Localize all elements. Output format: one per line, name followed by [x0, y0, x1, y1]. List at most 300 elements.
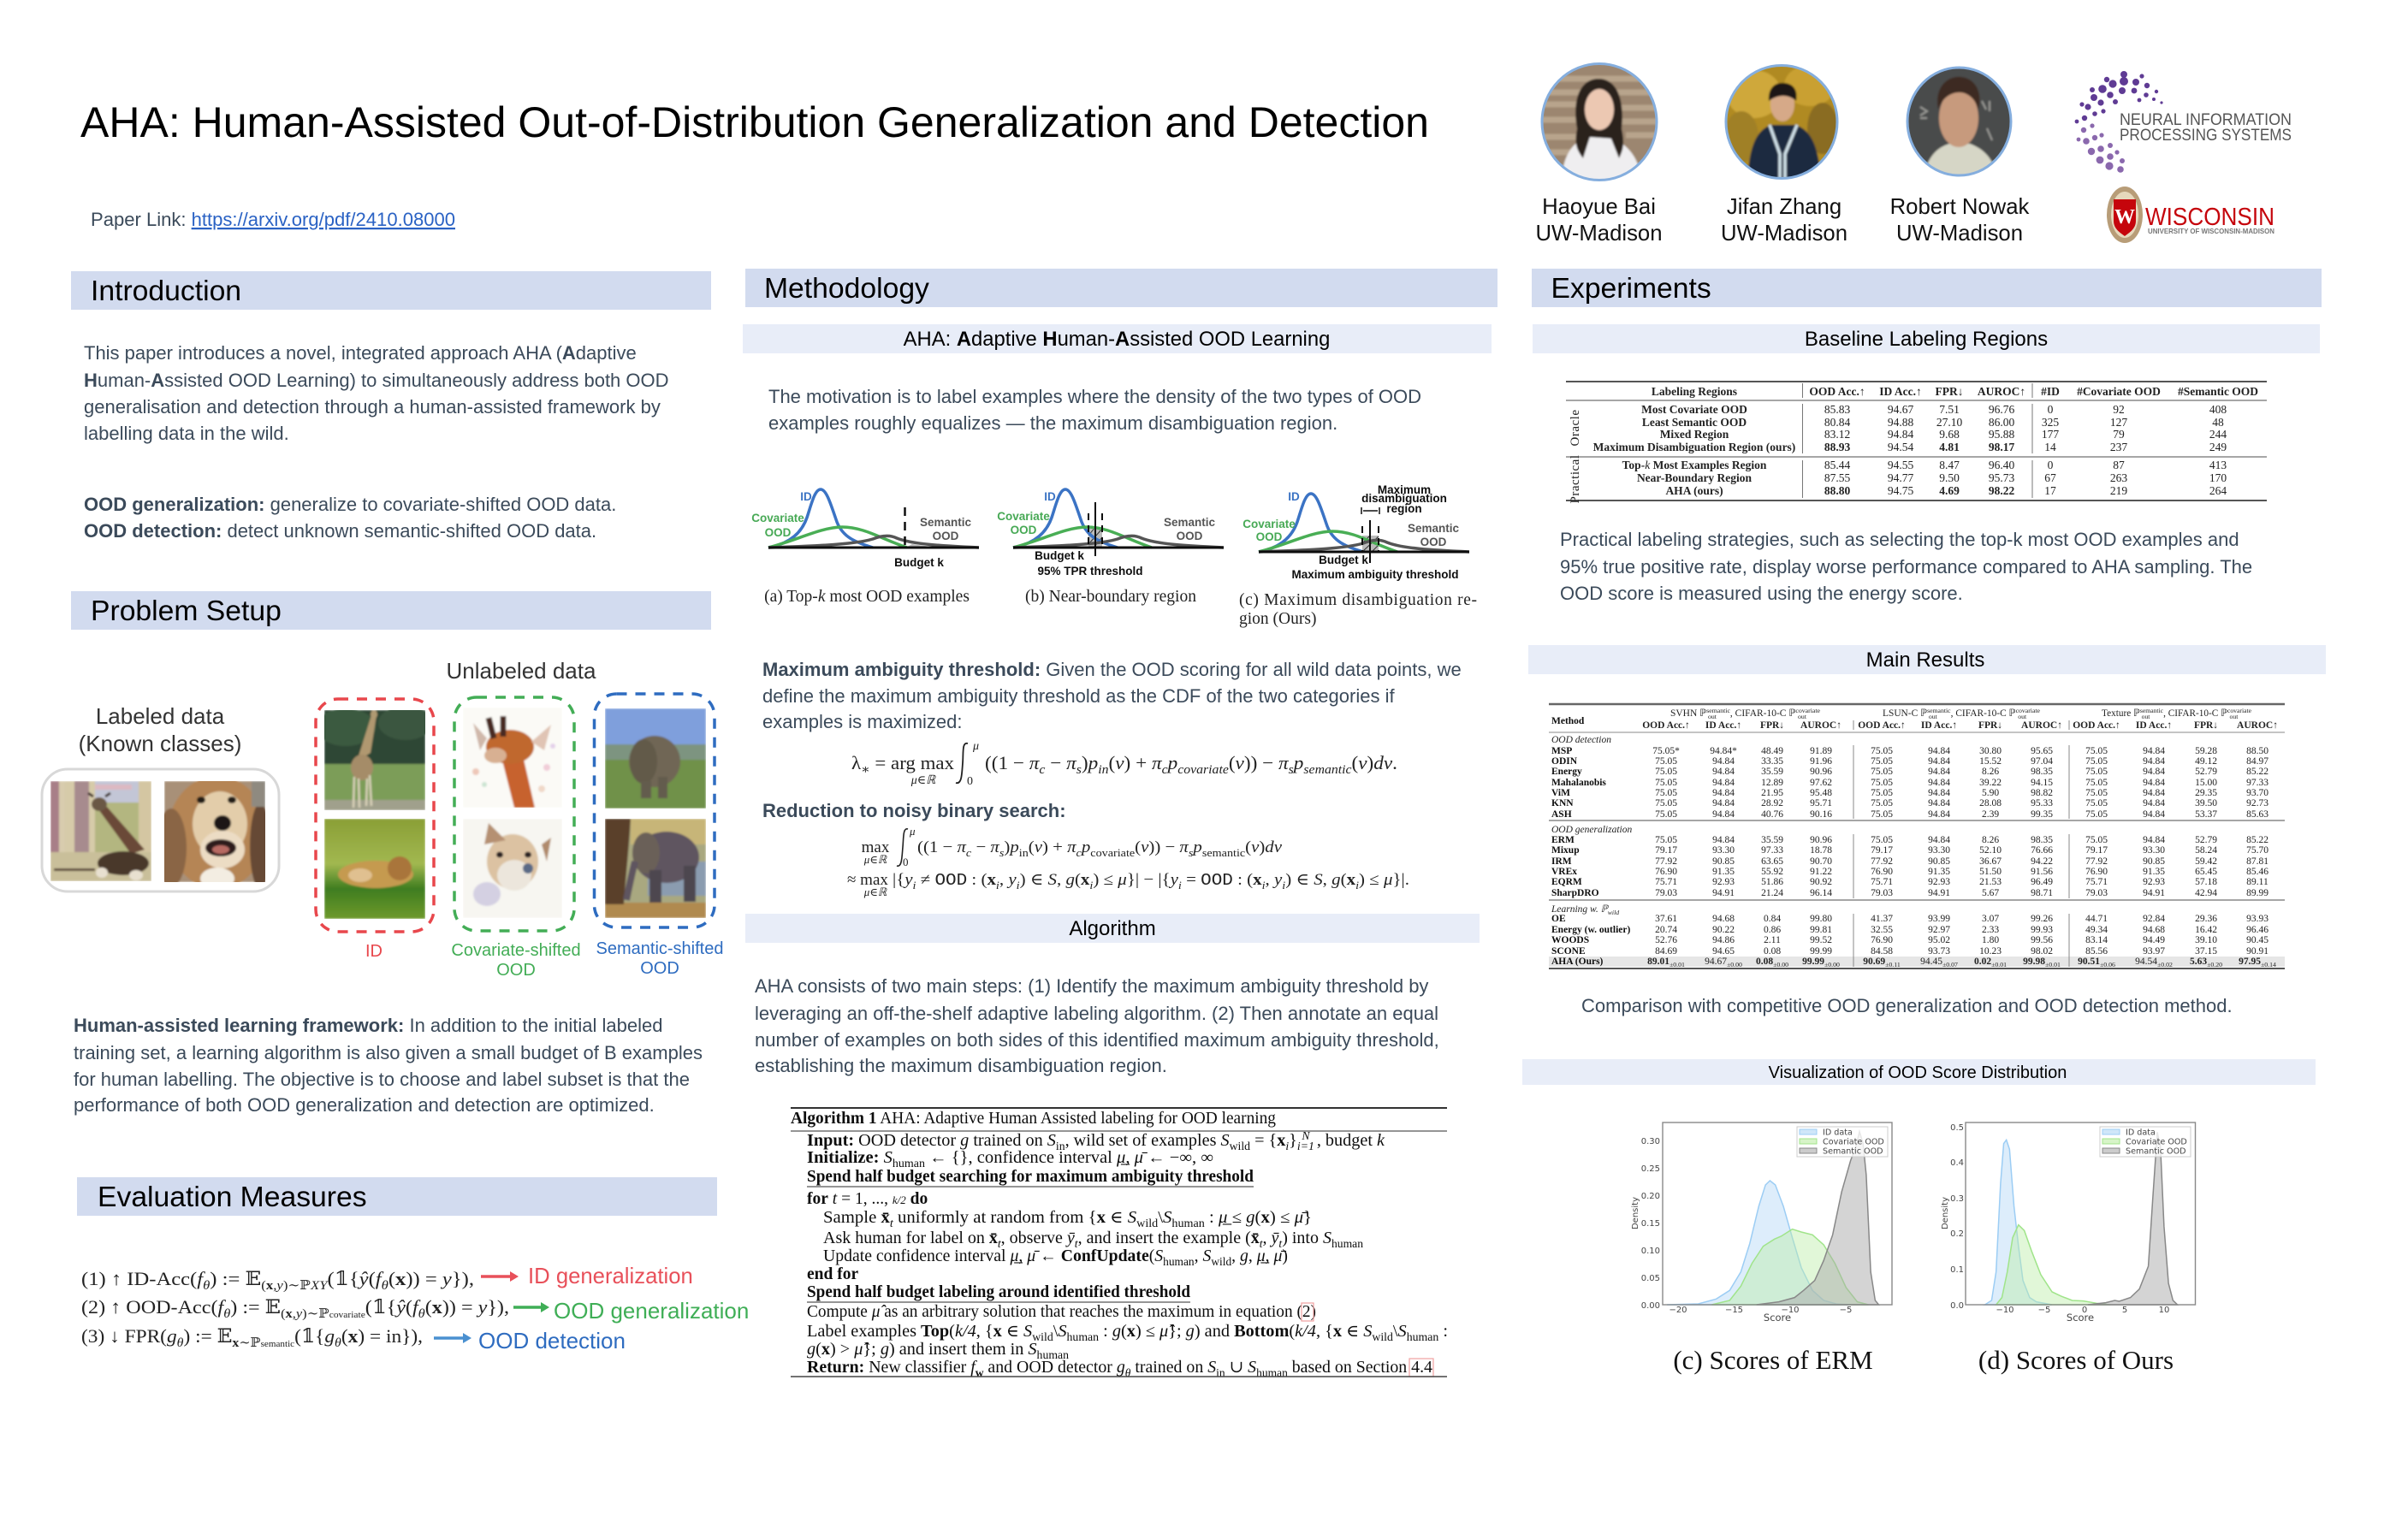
table: main results: LSUN-C ℙsemanticout , CIFAR-10-C ℙcovariateout — [1883, 707, 2041, 720]
table: main results: OOD Acc.↑ — [2073, 720, 2120, 731]
table: main results: 85.56 — [2085, 946, 2108, 957]
labels: data categories: Semantic-shifted — [596, 939, 723, 958]
table: baseline labeling regions: 92 — [2113, 403, 2125, 416]
table: baseline labeling regions: 219 — [2110, 484, 2127, 497]
table: baseline labeling regions: 27.10 — [1936, 416, 1962, 429]
chart: scores of ours: 0 — [2082, 1306, 2087, 1315]
table: baseline labeling regions: Least Semantic OOD — [1642, 416, 1747, 429]
text: definitions — [84, 494, 616, 542]
table: main results: 75.70 — [2246, 845, 2268, 856]
table: main results: 94.84 — [1928, 798, 1950, 808]
table: main results: 97.95±0.14 — [2239, 957, 2276, 968]
figure c: maximum disambiguation region: (c) Maximum disambiguation re- — [1239, 591, 1477, 609]
table: main results: 21.95 — [1761, 788, 1783, 798]
captions: score charts: (c) Scores of ERM — [1673, 1345, 1873, 1375]
author names — [1536, 195, 2030, 246]
table: main results: Learning w. ℙwild — [1551, 904, 1619, 916]
table: main results: 79.17 — [1871, 845, 1893, 856]
table: baseline labeling regions: AHA (ours) — [1665, 484, 1723, 497]
table: baseline labeling regions: 413 — [2209, 459, 2227, 471]
table: baseline labeling regions: 85.83 — [1824, 403, 1850, 416]
text: motivation — [768, 386, 1421, 434]
text: reduction heading: Reduction to noisy binary search: — [762, 800, 1066, 821]
table: main results: 52.79 — [2195, 767, 2217, 777]
chart: scores of ERM: 0.25 — [1641, 1164, 1660, 1174]
table: main results: 53.37 — [2195, 809, 2217, 820]
equations: (1) ↑ ID-Acc( fθ) := 𝔼 (x,y)∼ℙXY(𝟙{ŷ(fθ(x)) = y}), — [81, 1268, 474, 1293]
table: main results: 94.84 — [2143, 767, 2165, 777]
table: main results: 75.05 — [1655, 798, 1677, 808]
author names: UW-Madison — [1896, 222, 2023, 246]
table: main results: 90.70 — [1810, 856, 1832, 867]
table: baseline labeling regions: 88.93 — [1824, 441, 1850, 453]
table: main results: OOD Acc.↑ — [1642, 720, 1690, 731]
text: motivation: The motivation is to label examples where the density of the two types of OOD — [768, 386, 1421, 407]
table: main results: 75.71 — [1871, 877, 1893, 887]
table: main results: ASH — [1551, 809, 1572, 820]
captions: score charts — [1673, 1345, 2174, 1375]
table: main results: ODIN — [1551, 756, 1578, 767]
table: baseline labeling regions: Mixed Region — [1660, 428, 1729, 441]
table: main results: 90.85 — [2143, 856, 2165, 867]
table: main results: 21.24 — [1761, 888, 1783, 898]
table: main results: 94.84 — [1928, 788, 1950, 798]
chart: scores of ERM: Semantic OOD — [1823, 1146, 1883, 1157]
table: baseline labeling regions: 9.68 — [1939, 428, 1960, 441]
table: main results: 37.61 — [1655, 914, 1677, 924]
table: main results: OE — [1551, 914, 1566, 924]
figure a: top-k most OOD examples: Budget k — [894, 556, 944, 569]
chart: scores of ours: 0.3 — [1950, 1194, 1964, 1204]
chart: scores of ours — [1941, 1122, 2196, 1324]
text: human-assisted learning framework: Human-assisted learning framework: In addition to the initial labeled — [74, 1015, 662, 1036]
table: baseline labeling regions: 249 — [2209, 441, 2227, 453]
table: main results: 79.17 — [1655, 845, 1677, 856]
figure b: near-boundary region: OOD — [1177, 530, 1203, 542]
figure a: top-k most OOD examples: Covariate — [751, 512, 804, 524]
chart: scores of ours: −5 — [2038, 1306, 2050, 1315]
chart: scores of ERM: 0.00 — [1641, 1301, 1660, 1311]
table: baseline labeling regions: 94.54 — [1888, 441, 1913, 453]
equation: lambda: μ∈ℝ — [910, 774, 936, 787]
table: main results: 75.05 — [2085, 835, 2108, 845]
table: main results: 28.08 — [1979, 798, 2002, 808]
table: baseline labeling regions: 83.12 — [1824, 428, 1850, 441]
table: main results: 39.22 — [1979, 778, 2002, 788]
table: main results: OOD generalization — [1551, 825, 1632, 835]
table: baseline labeling regions: 325 — [2042, 416, 2059, 429]
table: main results: 92.93 — [1712, 877, 1735, 887]
chart: scores of ours: Score — [2067, 1312, 2094, 1324]
labels: data categories: OOD — [640, 959, 679, 978]
table: main results: 95.71 — [1810, 798, 1832, 808]
table: main results: 59.42 — [2195, 856, 2217, 867]
table: main results: 91.56 — [2031, 867, 2053, 877]
chart: scores of ERM: Score — [1764, 1312, 1791, 1324]
table: main results: 37.15 — [2195, 946, 2217, 957]
text: human-assisted learning framework: for human labelling. The objective is to choose and label subset is that the — [74, 1069, 690, 1090]
table: baseline labeling regions: 79 — [2113, 428, 2125, 441]
table: baseline labeling regions: 237 — [2110, 441, 2127, 453]
figure a: top-k most OOD examples: Semantic — [920, 516, 972, 529]
table: main results: 32.55 — [1871, 925, 1893, 935]
table: main results: 2.11 — [1764, 935, 1781, 945]
table: main results: 98.02 — [2031, 946, 2053, 957]
logo: Wisconsin: WISCONSIN — [2145, 204, 2274, 231]
table: baseline labeling regions: Maximum Disambiguation Region (ours) — [1593, 441, 1795, 453]
table: main results: 98.82 — [2031, 788, 2053, 798]
captions: score charts: (d) Scores of Ours — [1978, 1345, 2174, 1375]
table: main results: 96.46 — [2246, 925, 2268, 935]
table: main results: 30.80 — [1979, 746, 2002, 756]
table: main results: 75.05 — [1655, 809, 1677, 820]
chart: scores of ERM: −20 — [1669, 1306, 1687, 1315]
table: main results: Method — [1551, 716, 1585, 726]
algorithm box: Input: OOD detector g trained on Sin, wild set of examples Swild = {xi}i=1N , budget k — [807, 1129, 1385, 1152]
table: main results: 84.69 — [1655, 946, 1677, 957]
chart: scores of ERM: 0.05 — [1641, 1274, 1660, 1283]
table: main results: 40.76 — [1761, 809, 1783, 820]
table: main results: 90.91 — [2246, 946, 2268, 957]
equation: lambda: ((1 − πc − πs)pin(ν) + πcpcovariate(ν)) − πspsemantic(ν)dν. — [985, 752, 1397, 777]
table: main results: 88.50 — [2246, 746, 2268, 756]
table: baseline labeling regions: FPR↓ — [1936, 385, 1963, 398]
table: main results: KNN — [1551, 798, 1574, 808]
figure b: near-boundary region: OOD — [1011, 524, 1037, 536]
table: main results: 99.80 — [1810, 914, 1832, 924]
chart: scores of ours: Density — [1941, 1197, 1950, 1229]
table: main results: 41.37 — [1871, 914, 1893, 924]
table: main results: SVHN ℙsemanticout , CIFAR-10-C ℙcovariateout — [1670, 707, 1821, 720]
table: main results: 91.89 — [1810, 746, 1832, 756]
table: main results: ID Acc.↑ — [1705, 720, 1741, 731]
text: algorithm summary: leveraging an off-the-shelf adaptive labeling algorithm. (2) Then annotate an equal — [755, 1003, 1438, 1024]
table: baseline labeling regions: 94.84 — [1888, 428, 1913, 441]
chart: scores of ERM: Density — [1631, 1197, 1640, 1229]
table: main results: FPR↓ — [1760, 720, 1784, 731]
algorithm box: Algorithm 1 AHA: Adaptive Human Assisted labeling for OOD learning — [791, 1110, 1276, 1128]
equation: noisy binary search: μ∈ℝ — [863, 886, 887, 898]
table: main results: 94.84 — [1712, 767, 1735, 777]
equations — [81, 1268, 509, 1350]
labels: data categories: OOD — [496, 961, 536, 980]
table: baseline labeling regions: 263 — [2110, 471, 2127, 484]
algorithm box: Return: New classifier fw and OOD detector gθ trained on Sin ∪ Shuman based on Section 4.4 — [807, 1359, 1432, 1379]
table: main results: 75.05 — [2085, 756, 2108, 767]
table: main results: MSP — [1551, 746, 1572, 756]
table: main results: 87.81 — [2246, 856, 2268, 867]
table: baseline labeling regions: 4.81 — [1939, 441, 1960, 453]
table: main results: 79.03 — [1655, 888, 1677, 898]
table: baseline labeling regions: Oracle — [1569, 410, 1582, 446]
subheading: baseline labeling regions: Baseline Labeling Regions — [1805, 328, 2048, 351]
table: main results: 93.97 — [2143, 946, 2165, 957]
author names: Haoyue Bai — [1542, 195, 1656, 219]
heading: introduction: Introduction — [91, 275, 241, 307]
table: main results: 15.52 — [1979, 756, 2002, 767]
table: main results: 90.96 — [1810, 767, 1832, 777]
table: main results: 94.84 — [2143, 809, 2165, 820]
table: main results: 95.65 — [2031, 746, 2053, 756]
table: main results: 28.92 — [1761, 798, 1783, 808]
figure c: maximum disambiguation region: region — [1386, 502, 1422, 515]
chart: scores of ours: 0.1 — [1950, 1265, 1964, 1275]
figure: labeling regions — [751, 483, 1477, 628]
figure b: near-boundary region: Budget k — [1035, 549, 1084, 562]
heading: experiments: Experiments — [1551, 272, 1711, 305]
table: main results: 75.05 — [1871, 809, 1893, 820]
table: main results: 99.93 — [2031, 925, 2053, 935]
table: baseline labeling regions: Labeling Regions — [1652, 385, 1737, 398]
table: main results: 75.71 — [2085, 877, 2108, 887]
equation: lambda: 0 — [967, 775, 973, 788]
table: main results: 94.84* — [1710, 746, 1737, 756]
text: maximum ambiguity threshold: Maximum ambiguity threshold: Given the OOD scoring for all wild data points, we — [762, 659, 1462, 680]
equation: noisy binary search: max — [862, 838, 890, 856]
table: main results: 97.62 — [1810, 778, 1832, 788]
table: main results: 90.45 — [2246, 935, 2268, 945]
table: main results: 21.53 — [1979, 877, 2002, 887]
table: main results: 99.99±0.00 — [1802, 957, 1840, 968]
table: main results: 76.66 — [2031, 845, 2053, 856]
algorithm box: Label examples Top(k/4, {x ∈ Swild\Shuman : g(x) ≤ μ̂}; g) and Bottom(k/4, {x ∈ Swild\Shuman : — [807, 1323, 1448, 1343]
table: main results: OOD Acc.↑ — [1858, 720, 1906, 731]
table: main results: 99.99 — [1810, 946, 1832, 957]
table: main results: 58.24 — [2195, 845, 2217, 856]
text: baseline findings: OOD score is measured using the energy score. — [1560, 583, 1963, 604]
table: main results: WOODS — [1551, 935, 1589, 945]
table: main results: 0.08 — [1764, 946, 1781, 957]
chart: scores of ERM: −10 — [1781, 1306, 1800, 1315]
table: baseline labeling regions: Near-Boundary Region — [1637, 471, 1753, 484]
table: main results: 94.84 — [2143, 835, 2165, 845]
table: main results: 8.26 — [1982, 835, 1999, 845]
table: main results: 90.96 — [1810, 835, 1832, 845]
logo: Wisconsin: UNIVERSITY OF WISCONSIN-MADISON — [2148, 227, 2274, 235]
table: baseline labeling regions: 0 — [2048, 403, 2054, 416]
table: main results: 75.05 — [1871, 746, 1893, 756]
table: main results: 94.84 — [2143, 798, 2165, 808]
table: main results: 94.84 — [1712, 778, 1735, 788]
label: labeled data — [79, 703, 241, 756]
table: main results: 94.84 — [2143, 778, 2165, 788]
chart: scores of ours: 0.4 — [1950, 1158, 1964, 1168]
figure a: top-k most OOD examples: OOD — [933, 530, 959, 542]
table: main results: 93.30 — [2143, 845, 2165, 856]
table: main results: 90.85 — [1712, 856, 1735, 867]
table: main results: 51.86 — [1761, 877, 1783, 887]
label: labeled data: (Known classes) — [79, 731, 241, 756]
table: baseline labeling regions: 67 — [2044, 471, 2056, 484]
figure c: maximum disambiguation region: gion (Ours) — [1239, 610, 1316, 628]
text: algorithm summary — [755, 975, 1439, 1076]
table: main results: 75.05 — [1871, 756, 1893, 767]
text: algorithm summary: AHA consists of two main steps: (1) Identify the maximum ambiguity threshold by — [755, 975, 1428, 997]
table: main results: 48.49 — [1761, 746, 1783, 756]
figure c: maximum disambiguation region: OOD — [1256, 530, 1283, 543]
figure c: maximum disambiguation region: Maximum — [1378, 483, 1431, 496]
logo wordmark: NeurIPS: NEURAL INFORMATION — [2120, 111, 2292, 129]
avatar: Haoyue Bai — [1540, 62, 1658, 184]
table: main results: 94.54±0.02 — [2135, 957, 2173, 968]
table: main results: AUROC↑ — [1800, 720, 1841, 731]
figure c: maximum disambiguation region: Covariate — [1242, 518, 1296, 530]
table: main results: 94.84 — [1712, 835, 1735, 845]
table: main results: 49.34 — [2085, 925, 2108, 935]
table: main results: 75.05 — [2085, 767, 2108, 777]
table: main results: OOD detection — [1551, 735, 1611, 745]
table: main results: AHA (Ours) — [1551, 957, 1604, 967]
table: main results: 99.26 — [2031, 914, 2053, 924]
chart: scores of ERM: 0.15 — [1641, 1219, 1660, 1229]
table: main results: 79.03 — [1871, 888, 1893, 898]
arrow: ID generalization: ID generalization — [528, 1265, 693, 1288]
table: main results: Mixup — [1551, 845, 1580, 856]
table: main results: 92.73 — [2246, 798, 2268, 808]
text: baseline findings: Practical labeling strategies, such as selecting the top-k most OOD examples and — [1560, 529, 2239, 550]
table: main results: 52.76 — [1655, 935, 1677, 945]
table: main results: 51.50 — [1979, 867, 2002, 877]
table: main results: 93.99 — [1928, 914, 1950, 924]
table: main results: 94.84 — [1712, 798, 1735, 808]
arrow: OOD detection: OOD detection — [478, 1328, 626, 1353]
table: main results: Energy — [1551, 767, 1582, 777]
table: main results: 97.33 — [2246, 778, 2268, 788]
table: main results: 8.26 — [1982, 767, 1999, 777]
chart: scores of ERM: 0.10 — [1641, 1247, 1660, 1256]
table: baseline labeling regions: Practical — [1569, 455, 1582, 503]
table: main results: 92.84 — [2143, 914, 2165, 924]
group: covariate-shifted images — [454, 697, 574, 931]
table: main results: 99.35 — [2031, 809, 2053, 820]
subheading: visualization — [1522, 1059, 2316, 1085]
subheading: AHA — [743, 324, 1492, 353]
chart: scores of ours: Covariate OOD — [2126, 1138, 2187, 1146]
table: main results: 90.85 — [1928, 856, 1950, 867]
figure b: near-boundary region: Covariate — [997, 510, 1050, 523]
text: paper summary: labelling data in the wild. — [84, 423, 289, 444]
table: main results: 91.35 — [1712, 867, 1735, 877]
subheading: main results — [1528, 645, 2326, 674]
table: main results: 91.35 — [1928, 867, 1950, 877]
figure b: near-boundary region: (b) Near-boundary region — [1025, 588, 1196, 606]
text: algorithm summary: establishing the maximum disambiguation region. — [755, 1055, 1167, 1076]
equation: noisy binary search: μ — [909, 825, 916, 838]
table: baseline labeling regions: 95.88 — [1989, 428, 2014, 441]
table: main results: SCONE — [1551, 946, 1586, 957]
table: baseline labeling regions: 96.76 — [1989, 403, 2014, 416]
table: main results: 0.84 — [1764, 914, 1781, 924]
heading: experiments — [1532, 269, 2322, 307]
table: baseline labeling regions: 80.84 — [1824, 416, 1850, 429]
table: main results: 33.35 — [1761, 756, 1783, 767]
text: paper summary: This paper introduces a novel, integrated approach AHA (Adaptive — [84, 342, 637, 364]
table: main results: 75.05 — [1655, 756, 1677, 767]
table: baseline labeling regions: 48 — [2212, 416, 2224, 429]
authors — [1536, 62, 2030, 246]
table: main results: 35.59 — [1761, 767, 1783, 777]
table: main results: 99.98±0.01 — [2023, 957, 2061, 968]
text: algorithm summary: number of examples on both sides of this identified maximum ambiguity threshold, — [755, 1029, 1439, 1051]
chart: scores of ours: 10 — [2159, 1306, 2169, 1315]
subheading: algorithm: Algorithm — [1069, 917, 1156, 940]
equation: lambda — [851, 740, 1397, 788]
logo wordmark: NeurIPS: PROCESSING SYSTEMS — [2120, 127, 2292, 145]
table: main results: VREx — [1551, 867, 1577, 877]
table: main results: 94.67±0.00 — [1705, 957, 1742, 968]
table: main results: 90.16 — [1810, 809, 1832, 820]
table: main results: 99.81 — [1810, 925, 1832, 935]
table: main results: 0.08±0.00 — [1756, 957, 1788, 968]
table: main results: 94.84 — [1928, 835, 1950, 845]
table: main results: 84.58 — [1871, 946, 1893, 957]
table: main results: 98.71 — [2031, 888, 2053, 898]
table: main results: 90.92 — [1810, 877, 1832, 887]
table: baseline labeling regions: 127 — [2110, 416, 2127, 429]
table: main results: 99.56 — [2031, 935, 2053, 945]
figure c: maximum disambiguation region: ID — [1288, 490, 1300, 503]
group: semantic-shifted images — [594, 694, 715, 927]
table: main results: 90.69±0.11 — [1863, 957, 1901, 968]
table: main results: 79.03 — [2085, 888, 2108, 898]
table: main results: 65.45 — [2195, 867, 2217, 877]
chart: scores of ERM — [1631, 1122, 1892, 1324]
table: main results: 96.14 — [1810, 888, 1832, 898]
heading: introduction — [71, 271, 711, 310]
table: main results: 75.05 — [1655, 767, 1677, 777]
table: main results: 92.93 — [2143, 877, 2165, 887]
table: main results: 75.05 — [2085, 788, 2108, 798]
figure a: top-k most OOD examples: ID — [800, 490, 812, 503]
table: main results: 89.99 — [2246, 888, 2268, 898]
table: main results: 93.30 — [1928, 845, 1950, 856]
labels: data categories: ID — [365, 942, 383, 961]
table: main results: 10.23 — [1979, 946, 2002, 957]
equation: noisy binary search: ≈ max — [847, 871, 888, 889]
text: paper summary: generalisation and detection through a human-assisted framework by — [84, 396, 661, 418]
table: main results: 94.84 — [1712, 788, 1735, 798]
author names: Jifan Zhang — [1727, 195, 1841, 219]
table: baseline labeling regions: 87 — [2113, 459, 2125, 471]
panel: problem setup — [42, 591, 723, 1116]
table: main results: 5.67 — [1982, 888, 1999, 898]
panel: evaluation measures — [77, 1177, 749, 1353]
equation: noisy binary search: ((1 − πc − πs)pin(ν) + πcpcovariate(ν)) − πspsemantic(ν)dν — [917, 838, 1283, 859]
table: main results: 94.84 — [2143, 756, 2165, 767]
table: main results: ViM — [1551, 788, 1570, 798]
equation: lambda: μ — [972, 740, 979, 753]
text: motivation: examples roughly equalizes — the maximum disambiguation region. — [768, 412, 1337, 434]
chart: scores of ERM: −15 — [1725, 1306, 1743, 1315]
table: main results: 39.10 — [2195, 935, 2217, 945]
table: baseline labeling regions: 94.67 — [1888, 403, 1913, 416]
table: main results: 94.84 — [1928, 778, 1950, 788]
heading: evaluation measures: Evaluation Measures — [98, 1181, 367, 1213]
table: main results: 94.49 — [2143, 935, 2165, 945]
algorithm box: Spend half budget labeling around identified threshold — [807, 1283, 1190, 1301]
logo: Wisconsin — [2107, 187, 2274, 243]
table: main results: 44.71 — [2085, 914, 2108, 924]
table: main results: 94.15 — [2031, 778, 2053, 788]
table: main results: 98.35 — [2031, 767, 2053, 777]
table: main results: FPR↓ — [2194, 720, 2218, 731]
table: main results: 90.22 — [1712, 925, 1735, 935]
table: main results: 20.74 — [1655, 925, 1677, 935]
table: main results: 75.05 — [2085, 778, 2108, 788]
table: baseline labeling regions: 7.51 — [1939, 403, 1960, 416]
table: main results: 77.92 — [1871, 856, 1893, 867]
table: main results: ERM — [1551, 835, 1575, 845]
